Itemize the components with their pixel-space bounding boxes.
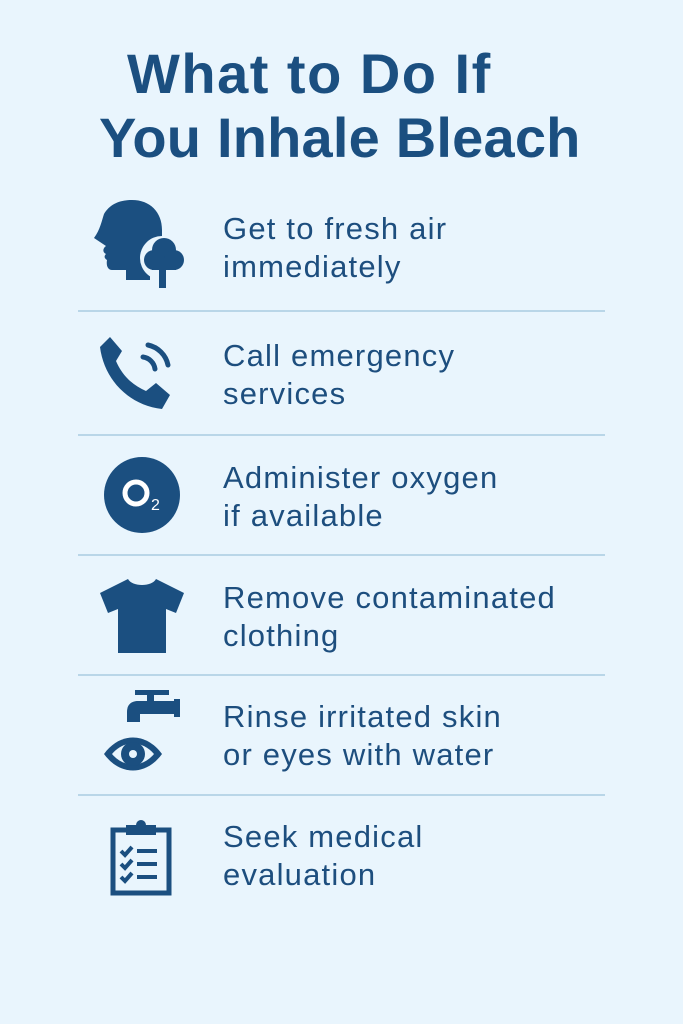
icon: shirt [100,579,184,653]
item: call [100,337,455,411]
text: services [223,376,346,411]
text: Call emergency [223,338,455,373]
text: clothing [223,618,339,653]
text [223,580,556,653]
text [223,460,498,533]
text: immediately [223,249,402,284]
text [223,211,447,284]
text: Administer oxygen [223,460,498,495]
text [223,338,455,411]
title: What to Do If [127,42,492,105]
icon: faucet and eye [104,690,180,770]
text: Rinse irritated skin [223,699,502,734]
text: evaluation [223,857,376,892]
text [223,819,424,892]
item: rinse [104,690,502,772]
title: You Inhale Bleach [99,106,581,169]
icon: clipboard [110,820,172,896]
text: Remove contaminated [223,580,556,615]
icon: O2 [104,457,180,533]
icon: head and tree [94,200,184,288]
text: Get to fresh air [223,211,447,246]
item: clothing [100,579,556,653]
item: medical [110,819,424,896]
item: oxygen [104,457,498,533]
icon: O2: 2 [151,497,160,514]
text [223,699,502,772]
text: Seek medical [223,819,424,854]
text: or eyes with water [223,737,494,772]
item: fresh air [94,200,447,288]
text: if available [223,498,384,533]
title [99,42,581,169]
icon: phone [100,337,170,409]
